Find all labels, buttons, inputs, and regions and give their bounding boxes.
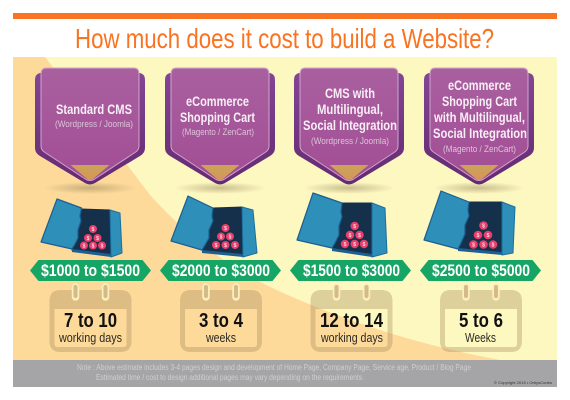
panel: CMS with Multilingual shield xyxy=(294,68,404,194)
footer note bar: Estimated time / cost to design additional pages may vary depending on the requirements. xyxy=(96,373,364,382)
icon: open safe 3 xyxy=(297,193,387,257)
panel: eCommerce Shopping Cart shield: (Magento / ZenCart) xyxy=(182,127,254,138)
footer note bar: Note : Above estimate includes 3-4 pages design and development of Home Page, Company Page, Service age, Product / Blog Page xyxy=(77,363,471,372)
icon: open safe 1: $ xyxy=(101,244,104,250)
icon: open safe 1 xyxy=(41,199,122,257)
calendar 2: 3 to 4 xyxy=(199,310,244,332)
panel: CMS with Multilingual shield: Multilingual, xyxy=(317,101,383,117)
icon: open safe 4: $ xyxy=(487,233,490,239)
panel: CMS with Multilingual shield: Social Integration xyxy=(303,117,397,133)
icon: open safe 1: $ xyxy=(92,227,95,233)
panel: eCommerce with Multilingual shield: Social Integration xyxy=(433,125,527,141)
icon: open safe 4: $ xyxy=(472,242,475,248)
icon: open safe 1: $ xyxy=(87,236,90,242)
footer note bar: © Copyright 2015 • OrbysCodes xyxy=(494,380,552,385)
icon: open safe 4: $ xyxy=(482,242,485,248)
calendar 4: Weeks xyxy=(465,330,496,345)
icon: open safe 3: $ xyxy=(353,224,356,230)
calendar 3: working days xyxy=(320,330,383,345)
calendar 1: 7 to 10 xyxy=(64,310,117,332)
panel: Standard CMS shield: (Wordpress / Joomla) xyxy=(55,119,133,130)
icon: open safe 2: $ xyxy=(224,226,227,232)
icon: open safe 3: $ xyxy=(363,242,366,248)
panel: eCommerce Shopping Cart shield xyxy=(165,68,275,194)
footer note bar xyxy=(13,360,557,387)
icon: open safe 3: $ xyxy=(344,242,347,248)
icon: open safe 4: $ xyxy=(492,242,495,248)
panel: Standard CMS shield xyxy=(35,68,145,194)
price tag 2: $2000 to $3000 xyxy=(172,261,270,280)
icon: open safe 1: $ xyxy=(83,244,86,250)
panel: eCommerce Shopping Cart shield: Shopping Cart xyxy=(180,109,255,125)
top orange bar xyxy=(13,13,557,19)
calendar 3 xyxy=(310,287,392,352)
calendar 2: weeks xyxy=(205,330,236,345)
panel: CMS with Multilingual shield: (Wordpress / Joomla) xyxy=(311,136,389,147)
icon: open safe 4: $ xyxy=(482,224,485,230)
calendar 1: working days xyxy=(58,330,122,345)
icon: open safe 2: $ xyxy=(220,234,223,240)
icon: open safe 2: $ xyxy=(229,234,232,240)
panel: eCommerce Shopping Cart shield: eCommerce xyxy=(186,93,249,109)
panel: eCommerce with Multilingual shield xyxy=(424,68,534,194)
icon: open safe 2: $ xyxy=(234,243,237,249)
calendar 4: 5 to 6 xyxy=(459,310,503,332)
icon: open safe 1: $ xyxy=(96,236,99,242)
background panel xyxy=(13,57,557,360)
calendar 3: 12 to 14 xyxy=(320,310,384,332)
icon: open safe 3: $ xyxy=(349,233,352,239)
icon: open safe 3: $ xyxy=(358,233,361,239)
icon: open safe 2: $ xyxy=(224,243,227,249)
panel: eCommerce with Multilingual shield: Shopping Cart xyxy=(442,93,517,109)
icon: open safe 4: $ xyxy=(477,233,480,239)
icon: open safe 3: $ xyxy=(353,242,356,248)
panel: eCommerce with Multilingual shield: eCommerce xyxy=(448,77,511,93)
calendar 4 xyxy=(440,287,522,352)
panel: Standard CMS shield: Standard CMS xyxy=(56,101,132,117)
panel: eCommerce with Multilingual shield: (Magento / ZenCart) xyxy=(443,144,516,155)
price tag 3: $1500 to $3000 xyxy=(303,261,400,280)
price tag 4: $2500 to $5000 xyxy=(432,261,530,280)
panel: CMS with Multilingual shield: CMS with xyxy=(325,85,375,101)
icon: open safe 4 xyxy=(424,191,515,255)
calendar 1 xyxy=(50,287,132,352)
icon: open safe 2: $ xyxy=(215,243,218,249)
calendar 2 xyxy=(180,287,262,352)
price tag 1: $1000 to $1500 xyxy=(41,261,140,280)
panel: eCommerce with Multilingual shield: with Multilingual, xyxy=(433,109,525,125)
icon: open safe 2 xyxy=(171,196,257,257)
icon: open safe 1: $ xyxy=(92,244,95,250)
